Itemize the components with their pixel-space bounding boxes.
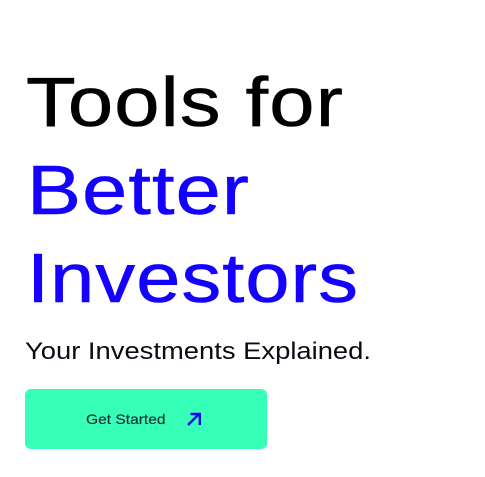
- button background: [25, 389, 267, 449]
- icon: arrow: [188, 414, 200, 425]
- subtitle: Your Investments Explained.: [25, 338, 371, 365]
- title line: Better: Better: [27, 151, 250, 229]
- title line: Tools for: Tools for: [26, 63, 344, 141]
- button: Get Started: [25, 389, 267, 449]
- title: [26, 63, 359, 317]
- title line: Investors: Investors: [27, 239, 359, 317]
- button label: Get Started: [86, 411, 166, 427]
